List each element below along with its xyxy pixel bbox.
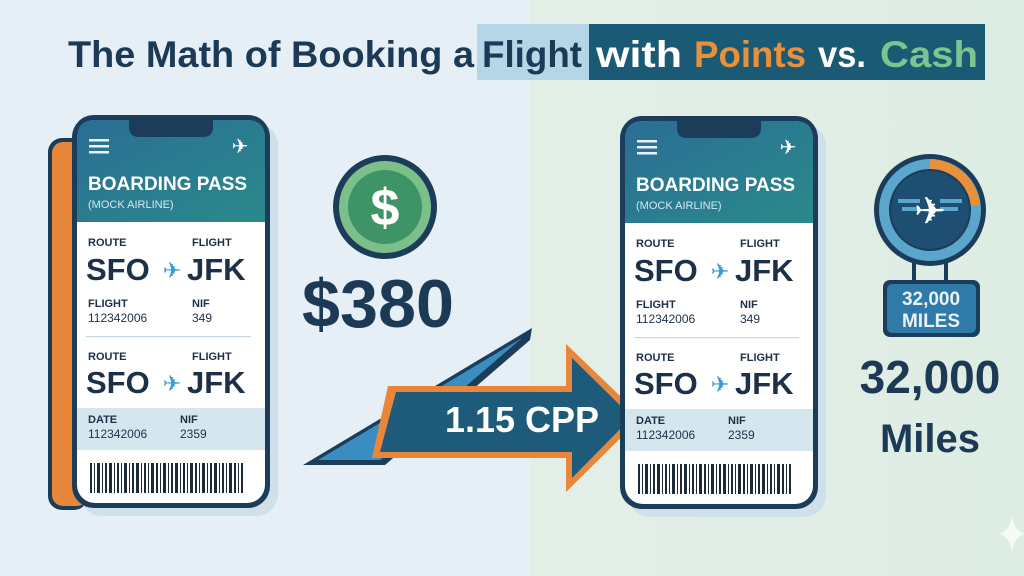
title: with [595,34,682,75]
title: vs. [818,34,866,75]
title: The Math of Booking a [68,34,474,75]
title [68,24,985,80]
icon: miles badge [874,154,986,337]
arrow: conversion 1.15 CPP: 1.15 CPP [445,399,599,440]
title: Points [694,34,806,75]
icon: miles badge: 32,000 [902,289,960,310]
miles total [860,351,1000,461]
icon: miles badge: ✈ [914,191,946,233]
icon: miles badge: MILES [902,311,960,332]
orange back card [48,138,88,510]
arrow: conversion 1.15 CPP [303,328,642,492]
right phone: points booking [620,116,826,517]
cash price: $380 [302,266,454,342]
icon: sparkle [1000,516,1024,552]
miles total: 32,000 [860,351,1000,403]
icon: dollar coin [333,155,437,259]
background right half [530,0,1024,576]
title: Flight [482,34,582,75]
left phone: cash booking [48,115,278,516]
title: Cash [880,34,978,75]
icon: dollar coin: $ [371,179,400,237]
miles total: Miles [880,417,980,461]
